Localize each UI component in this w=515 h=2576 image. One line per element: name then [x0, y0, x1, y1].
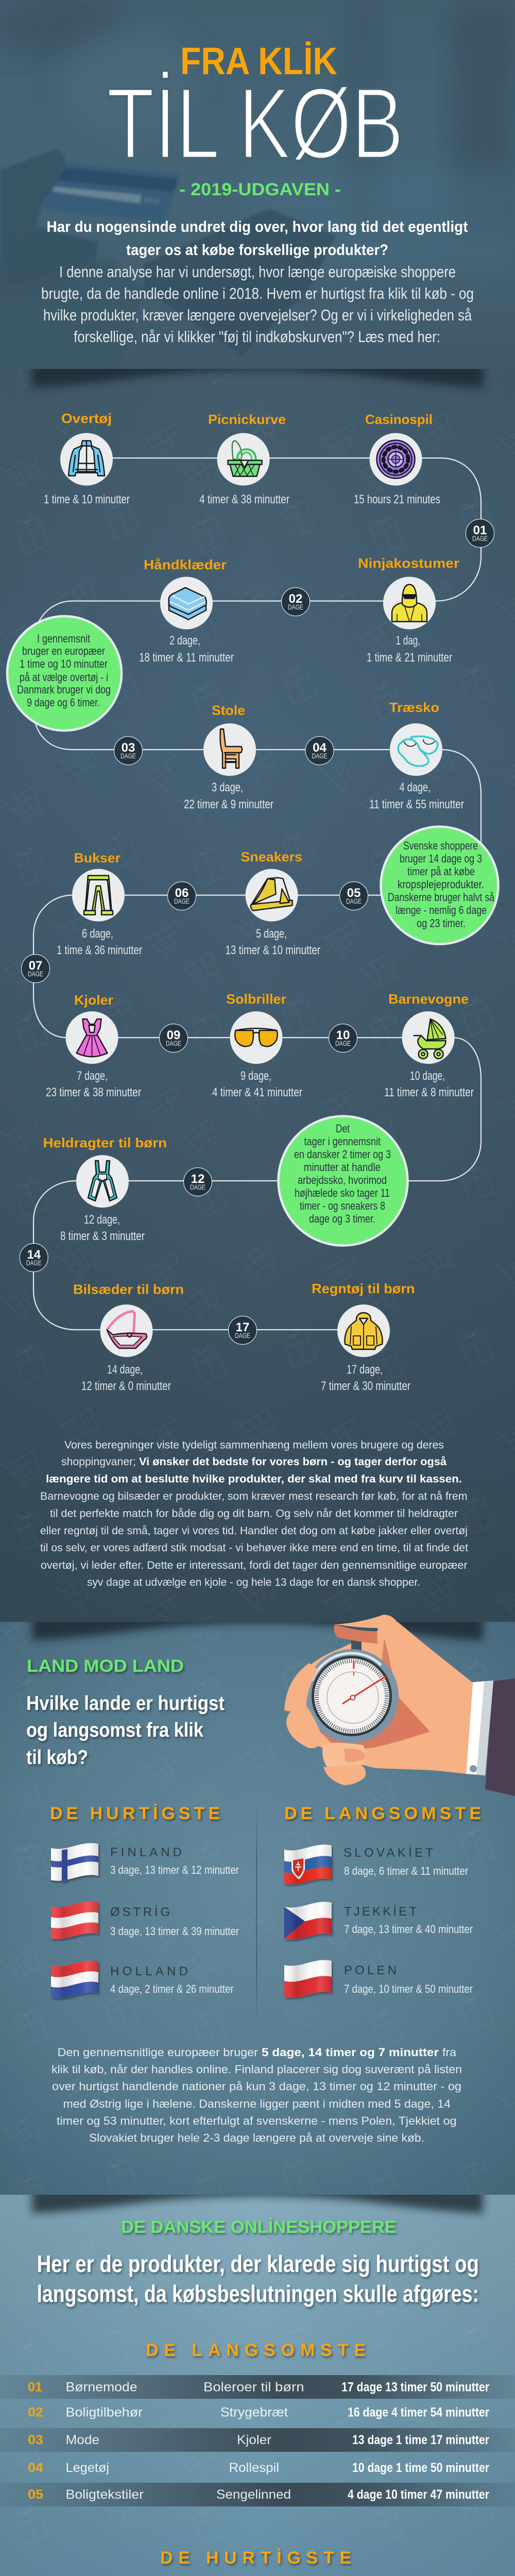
country: slovakiet: 8 dage, 6 timer & 11 minutter	[344, 1865, 468, 1877]
row 3: 03	[28, 2433, 43, 2447]
step: regntøj til børn: 7 timer & 30 minutter	[321, 1379, 410, 1393]
row 5: 4 dage 10 timer 47 minutter	[348, 2487, 489, 2502]
step: kjoler	[46, 992, 141, 1099]
step: stole: 22 timer & 9 minutter	[184, 798, 273, 811]
step: træsko	[369, 700, 464, 811]
question: og langsomst fra klik	[26, 1719, 203, 1741]
column heading: de hurtigste: DE HURTİGSTE	[50, 1804, 220, 1823]
background photo: hands, credit card and phone: CCV	[144, 195, 160, 205]
row 2: Boligtilbehør	[66, 2405, 143, 2420]
badge: 05 dage: DAGE	[346, 897, 362, 905]
row 4	[28, 2461, 489, 2475]
step: stole: 3 dage,	[212, 781, 243, 794]
title	[107, 40, 404, 180]
step: solbriller: Solbriller	[226, 991, 286, 1007]
step: ninjakostumer	[358, 555, 459, 665]
country: finland	[51, 1843, 239, 1882]
text block: gennemsnitlige europæer: timer og 53 minutter, kort efterfulgt af svenskerne - mens Polen, Tjekkiet og	[57, 2114, 456, 2127]
step: bilsæder til børn: Bilsæder til børn	[73, 1282, 184, 1297]
step: heldragter til børn: Heldragter til børn	[43, 1135, 167, 1150]
row 2: Strygebræt	[220, 2405, 288, 2420]
badge: 09 dage	[160, 1024, 187, 1052]
step: regntøj til børn	[312, 1281, 415, 1393]
badge: 02 dage: 02	[289, 592, 302, 606]
stopwatch	[305, 1639, 399, 1743]
step: bukser: Bukser	[74, 850, 121, 866]
flag: holland	[51, 1960, 98, 1998]
icon: towels	[169, 587, 207, 619]
step: sneakers: 13 timer & 10 minutter	[226, 943, 320, 957]
row 4: Legetøj	[66, 2461, 109, 2475]
intro text: forskellige, når vi klikker "føj til indkøbskurven"? Læs med her:	[74, 328, 440, 346]
badge: 06 dage: 06	[175, 886, 188, 900]
badge: 12 dage	[183, 1167, 212, 1196]
badge: 04 dage: 04	[313, 741, 327, 755]
step: håndklæder: Håndklæder	[144, 557, 227, 572]
country: tjekkiet: 7 dage, 13 timer & 40 minutter	[344, 1923, 473, 1936]
callout: svenske shoppere: kropsplejeprodukter.	[398, 878, 484, 891]
text block: gennemsnitlige europæer: klik til køb, når der handles online. Finland placerer sig dog suverænt på listen	[52, 2063, 462, 2076]
row 3	[28, 2433, 489, 2447]
step: solbriller: 4 timer & 41 minutter	[212, 1086, 302, 1099]
icon: overalls	[88, 1161, 117, 1201]
flag: østrig	[51, 1901, 98, 1939]
icon: sunglasses	[235, 1028, 278, 1046]
step: barnevogne: 11 timer & 8 minutter	[384, 1086, 474, 1099]
step: bilsæder til børn	[73, 1282, 184, 1393]
step: træsko: Træsko	[389, 700, 439, 715]
panel: header	[0, 0, 515, 369]
badge: 05 dage: 05	[347, 886, 360, 900]
step: bukser	[57, 850, 142, 957]
step: ninjakostumer: Ninjakostumer	[358, 555, 459, 571]
step: picnickurve: Picnickurve	[208, 412, 286, 427]
text block: beregninger: til os selv, er vores adfærd stik modsat - vi behøver ikke mere end en time, til at finde det	[40, 1542, 468, 1554]
callout: svenske shoppere: timer på at købe	[407, 865, 475, 878]
step: sneakers: Sneakers	[241, 849, 302, 865]
step: ninjakostumer: 1 dag,	[396, 634, 420, 648]
icon: jacket	[68, 441, 105, 476]
callout: europæer overtøj: 1 time og 10 minutter	[20, 657, 108, 670]
callout: dansker arbejdssko: arbejdssko, hvorimod	[298, 1174, 387, 1187]
flag: slovakiet	[284, 1844, 332, 1885]
callout: svenske shoppere: Svenske shoppere	[403, 839, 478, 852]
country: polen	[284, 1960, 473, 1998]
text block: gennemsnitlige europæer: med Østrig lige i hælene. Danskerne ligger pænt i midten med 5 dage, 14	[63, 2097, 451, 2110]
icon: car seat	[107, 1311, 147, 1348]
step: barnevogne: Barnevogne	[388, 991, 469, 1007]
country: polen: POLEN	[344, 1963, 397, 1977]
row 4: Rollespil	[229, 2461, 279, 2475]
country: finland: FINLAND	[110, 1845, 182, 1859]
callout: europæer overtøj: Danmark bruger vi dog	[17, 683, 111, 696]
text block: gennemsnitlige europæer: fra	[442, 2046, 457, 2059]
icon: raincoat	[345, 1313, 382, 1349]
step: casinospil: Casinospil	[365, 412, 433, 427]
step: træsko: 4 dage,	[400, 781, 431, 794]
text block: beregninger: eller regntøj til de små, tager vi vores tid. Handler det dog om at købe jakker eller overtøj	[40, 1525, 468, 1537]
icon: clogs	[398, 736, 438, 766]
text block: gennemsnitlige europæer	[52, 2046, 462, 2144]
callout: dansker arbejdssko: en dansker 2 timer og 3	[294, 1148, 391, 1161]
step: overtøj: Overtøj	[61, 411, 112, 426]
text block: gennemsnitlige europæer: 5 dage, 14 timer og 7 minutter	[262, 2046, 439, 2059]
row 5: Sengelinned	[216, 2487, 291, 2502]
badge: 02 dage: DAGE	[288, 603, 303, 611]
badge: 12 dage: 12	[191, 1172, 204, 1186]
icon: picnic basket	[228, 441, 262, 476]
text block: beregninger: til det perfekte match for både dig og dit barn. Og selv når det kommer til heldragter	[50, 1508, 458, 1520]
step: heldragter til børn: 12 dage,	[84, 1213, 120, 1227]
badge: 06 dage: DAGE	[174, 897, 190, 905]
icon: dress	[76, 1019, 107, 1057]
badge: 01 dage: DAGE	[472, 535, 488, 543]
icon: trousers	[84, 876, 113, 915]
callout: europæer overtøj: bruger en europæer	[22, 645, 105, 657]
callout: dansker arbejdssko: Det	[336, 1122, 350, 1135]
badge: 17 dage: DAGE	[235, 1332, 250, 1340]
row 1: Boleroer til børn	[203, 2380, 304, 2395]
intro question	[46, 218, 468, 259]
step: kjoler: 23 timer & 38 minutter	[46, 1086, 141, 1099]
step: solbriller: 9 dage,	[241, 1069, 271, 1083]
step: ninjakostumer: 1 time & 21 minutter	[367, 651, 452, 665]
badge: 10 dage: 10	[336, 1028, 350, 1042]
table heading: de langsomste: DE LANGSOMSTE	[146, 2341, 366, 2360]
title line: til køb: TİL KØB	[107, 67, 404, 180]
step: barnevogne	[384, 991, 474, 1099]
icon: chair	[220, 729, 242, 768]
text block: gennemsnitlige europæer: Den gennemsnitlige europæer bruger	[58, 2046, 258, 2059]
step: håndklæder: 18 timer & 11 minutter	[139, 651, 234, 665]
step: kjoler: Kjoler	[74, 992, 113, 1008]
row 1: 01	[28, 2380, 42, 2395]
subheading	[37, 2250, 479, 2307]
intro question: tager os at købe forskellige produkter?	[126, 242, 388, 259]
callout: dansker arbejdssko: timer - og sneakers 8	[300, 1199, 385, 1212]
badge: 14 dage: DAGE	[26, 1259, 42, 1267]
callout: svenske shoppere: længe - nemlig 6 dage	[396, 904, 487, 917]
country: østrig	[51, 1901, 239, 1939]
column heading: de langsomste: DE LANGSOMSTE	[284, 1804, 481, 1823]
row 1: 17 dage 13 timer 50 minutter	[341, 2380, 489, 2395]
step: håndklæder	[139, 557, 234, 665]
text block: beregninger: Vi ønsker det bedste for vores børn - og tager derfor også	[139, 1456, 447, 1468]
row 4: 04	[28, 2461, 43, 2475]
step: heldragter til børn: 8 timer & 3 minutter	[60, 1229, 145, 1243]
badge: 12 dage: DAGE	[190, 1183, 205, 1191]
callout: europæer overtøj: på at vælge overtøj - i	[20, 671, 108, 684]
callout: svenske shoppere: bruger 14 dage og 3	[400, 852, 482, 865]
badge: 03 dage	[114, 737, 142, 765]
table heading: de hurtigste: DE HURTİGSTE	[160, 2548, 351, 2568]
step: kjoler: 7 dage,	[77, 1069, 108, 1083]
badge: 04 dage	[305, 737, 334, 765]
row 5	[28, 2487, 489, 2502]
row 1: Børnemode	[66, 2380, 137, 2395]
country: slovakiet	[284, 1844, 468, 1885]
question: Hvilke lande er hurtigst	[26, 1692, 225, 1715]
step: bukser: 1 time & 36 minutter	[57, 943, 142, 957]
callout: dansker arbejdssko: minutter at handle	[304, 1161, 381, 1174]
callout: europæer overtøj: 9 dage og 6 timer.	[27, 696, 100, 709]
question	[26, 1692, 225, 1769]
badge: 10 dage	[329, 1024, 357, 1052]
badge: 01 dage: 01	[473, 523, 487, 537]
text block: beregninger: Vores beregninger viste tydeligt sammenhæng mellem vores brugere og deres	[64, 1439, 444, 1451]
row 5: 05	[28, 2487, 43, 2502]
intro text	[41, 263, 474, 346]
badge: 07 dage	[22, 954, 49, 983]
step: sneakers: 5 dage,	[256, 927, 287, 941]
row 2: 02	[28, 2405, 43, 2420]
flag: tjekkiet	[284, 1902, 332, 1940]
row 1	[28, 2380, 489, 2395]
row 5: Boligtekstiler	[66, 2487, 144, 2502]
badge: 14 dage	[20, 1244, 48, 1272]
panel: timeline	[0, 355, 515, 1622]
country: tjekkiet: TJEKKİET	[344, 1905, 417, 1919]
icon: ninja costume	[392, 584, 427, 621]
step: picnickurve: 4 timer & 38 minutter	[199, 493, 289, 506]
country: østrig: ØSTRİG	[110, 1905, 170, 1919]
country: slovakiet: SLOVAKİET	[344, 1846, 433, 1860]
heading: DE DANSKE ONLİNESHOPPERE	[121, 2217, 397, 2237]
callout: europæer overtøj	[7, 616, 122, 731]
row 3: 13 dage 1 time 17 minutter	[352, 2433, 489, 2447]
step: bilsæder til børn: 14 dage,	[107, 1363, 143, 1377]
illustration: hand holding stopwatch	[284, 1615, 515, 1796]
callout: europæer overtøj: I gennemsnit	[37, 632, 90, 645]
flag: finland	[51, 1843, 98, 1882]
badge: 17 dage: 17	[236, 1320, 249, 1334]
step: bukser: 6 dage,	[82, 927, 113, 941]
badge: 10 dage: DAGE	[335, 1040, 351, 1047]
timeline path	[33, 458, 481, 1330]
country: finland: 3 dage, 13 timer & 12 minutter	[110, 1863, 239, 1876]
text block: beregninger: syv dage at udvælge en kjole - og hele 13 dage for en dansk shopper.	[87, 1577, 420, 1588]
step: bilsæder til børn: 12 timer & 0 minutter	[81, 1379, 171, 1393]
question: til køb?	[26, 1747, 88, 1769]
country: polen: 7 dage, 10 timer & 50 minutter	[344, 1982, 473, 1995]
badge: 04 dage: DAGE	[312, 752, 328, 760]
callout: svenske shoppere: og 23 timer.	[417, 917, 466, 929]
text block: beregninger: Barnevogne og bilsæder er produkter, som kræver mest research før køb, for at nå frem	[40, 1490, 468, 1502]
icon: sneaker	[251, 878, 293, 911]
step: sneakers	[226, 849, 320, 957]
step: stole	[184, 703, 273, 811]
text block: beregninger	[40, 1439, 468, 1588]
row 4: 10 dage 1 time 50 minutter	[352, 2461, 489, 2475]
badge: 09 dage: DAGE	[166, 1040, 181, 1047]
step: heldragter til børn	[43, 1135, 167, 1243]
country: tjekkiet	[284, 1902, 473, 1940]
row 2	[28, 2405, 489, 2420]
text block: beregninger: længere tid om at beslutte hvilke produkter, der skal med fra kurv til kassen.	[46, 1473, 462, 1485]
country: østrig: 3 dage, 13 timer & 39 minutter	[110, 1925, 239, 1938]
badge: 07 dage: DAGE	[28, 970, 43, 978]
country: holland	[51, 1960, 234, 1998]
text block: beregninger: shoppingvaner;	[61, 1456, 136, 1468]
text block: beregninger: overtøj, vi leder efter. Dette er interessant, fordi det tager den gennemsnitlige europæer	[41, 1560, 468, 1571]
icon: roulette wheel	[377, 440, 415, 478]
badge: 06 dage	[168, 882, 196, 910]
step: stole: Stole	[212, 703, 245, 718]
badge: 05 dage	[340, 882, 368, 910]
step: regntøj til børn: 17 dage,	[347, 1363, 383, 1377]
badge: 07 dage: 07	[29, 959, 42, 973]
step: håndklæder: 2 dage,	[169, 634, 200, 648]
badge: 01 dage	[466, 519, 494, 547]
badge: 02 dage	[281, 587, 310, 616]
title line: fra klik: FRA KLİK	[180, 40, 337, 82]
step: picnickurve	[199, 412, 289, 506]
callout: dansker arbejdssko: dage og 3 timer.	[309, 1212, 375, 1225]
step: overtøj	[44, 411, 130, 506]
step: casinospil	[354, 412, 440, 506]
icon: stroller	[414, 1019, 446, 1059]
panel: land mod land	[0, 1608, 515, 2195]
country: holland: HOLLAND	[110, 1964, 188, 1978]
row 3: Kjoler	[237, 2433, 271, 2447]
step: overtøj: 1 time & 10 minutter	[44, 493, 130, 506]
badge: 09 dage: 09	[167, 1028, 180, 1042]
country: holland: 4 dage, 2 timer & 26 minutter	[110, 1982, 234, 1995]
panel: de danske onlineshoppere	[0, 2181, 515, 2576]
text block: gennemsnitlige europæer: over hurtigst handlende nationer på kun 3 dage, 13 timer og 12 minutter - og	[52, 2080, 461, 2093]
badge: 03 dage: DAGE	[121, 752, 136, 760]
badge: 14 dage: 14	[27, 1248, 41, 1262]
text block: gennemsnitlige europæer: Slovakiet bruger hele 2-3 dage længere på at overveje sine køb.	[89, 2131, 424, 2144]
intro question: Har du nogensinde undret dig over, hvor lang tid det egentligt	[46, 218, 468, 235]
row 2: 16 dage 4 timer 54 minutter	[348, 2405, 489, 2420]
step: træsko: 11 timer & 55 minutter	[369, 798, 464, 811]
edition label: - 2019-UDGAVEN -	[179, 180, 341, 199]
callout: svenske shoppere	[381, 826, 499, 944]
flag: polen	[284, 1960, 332, 1998]
step: casinospil: 15 hours 21 minutes	[354, 493, 440, 506]
step: solbriller	[212, 991, 302, 1099]
background photo: hands, credit card and phone	[0, 0, 515, 369]
step: barnevogne: 10 dage,	[410, 1069, 445, 1083]
callout: dansker arbejdssko: tager i gennemsnit	[304, 1135, 381, 1148]
callout: dansker arbejdssko: højhælede sko tager 11	[295, 1187, 390, 1199]
table: de langsomste	[0, 2375, 515, 2506]
callout: dansker arbejdssko	[278, 1116, 408, 1246]
badge: 17 dage	[229, 1316, 256, 1345]
heading: LAND MOD LAND	[27, 1656, 184, 1676]
step: regntøj til børn: Regntøj til børn	[312, 1281, 415, 1296]
badge: 03 dage: 03	[122, 741, 135, 755]
row 3: Mode	[66, 2433, 99, 2447]
